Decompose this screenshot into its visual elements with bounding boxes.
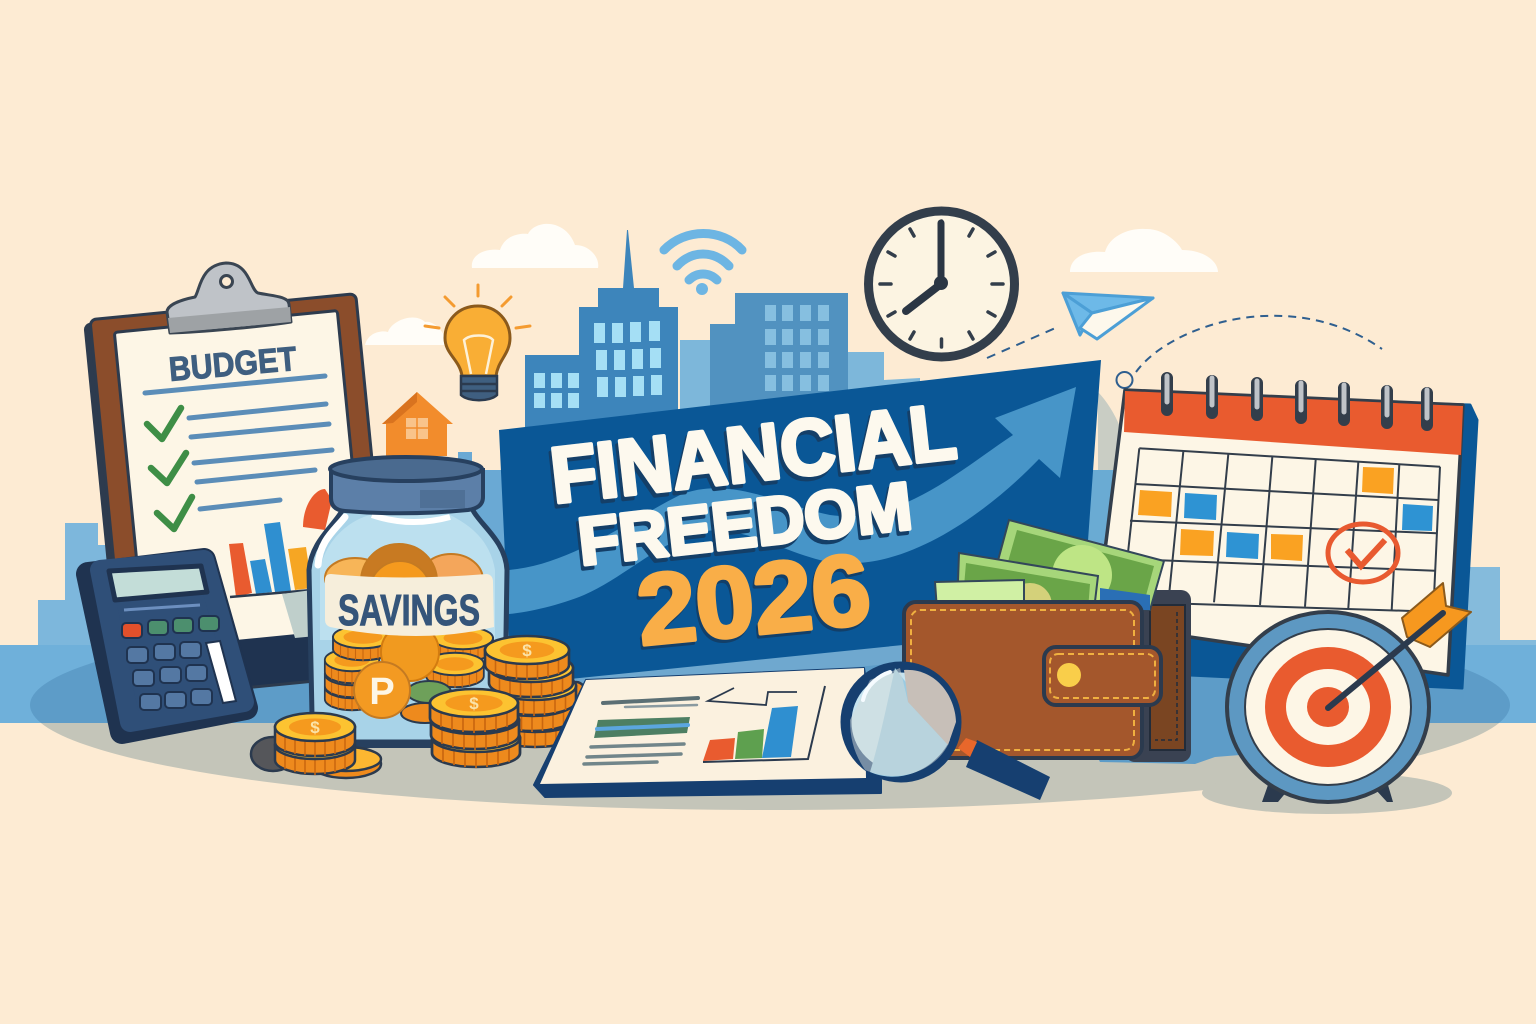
calculator screen (109, 566, 207, 600)
coin stack tall (485, 636, 577, 748)
target shadow (1202, 772, 1452, 814)
clipboard board (83, 294, 393, 702)
ground ellipse (30, 630, 1510, 810)
wifi icon (664, 234, 742, 295)
banknotes (935, 520, 1164, 627)
pale blue behind jar (458, 452, 505, 560)
coin stack left: $ (310, 718, 320, 737)
savings jar (309, 457, 507, 748)
calendar page (1095, 390, 1463, 675)
coins behind label (325, 544, 483, 619)
house icon (382, 392, 453, 456)
title line: Financial: FINANCIAL (543, 390, 958, 524)
banner (499, 360, 1101, 695)
clipboard (83, 263, 393, 702)
savings label (325, 574, 494, 636)
jar base shadow (318, 725, 500, 748)
clipboard clip (167, 263, 291, 333)
calendar check circle (1328, 524, 1398, 582)
target (1202, 583, 1471, 814)
budget heading: BUDGET (167, 340, 298, 389)
target legs (1262, 785, 1393, 802)
coin stack tall: $ (522, 641, 532, 660)
background skyline right (1440, 567, 1536, 660)
calendar header (1124, 391, 1463, 455)
title line: Freedom: FREEDOM (574, 469, 916, 580)
target arrow (1328, 583, 1471, 708)
clock (868, 211, 1014, 357)
wallet flap (1044, 647, 1161, 705)
wallet (904, 520, 1191, 762)
cloud small (365, 317, 447, 345)
budget list lines (145, 376, 332, 509)
coin stack middle: $ (469, 694, 479, 713)
wallet front (904, 602, 1142, 758)
title line: year: 2026 (632, 533, 875, 667)
blue ground band (0, 645, 1536, 723)
city buildings (525, 230, 920, 440)
jar coins lower: P (369, 671, 395, 713)
illustration scene (0, 206, 1536, 814)
report text lines (584, 698, 698, 764)
jar highlights (320, 515, 495, 640)
background skyline left (0, 523, 115, 660)
cloud right (1070, 229, 1218, 272)
mini bar chart (229, 489, 332, 638)
calculator (88, 560, 246, 732)
paper plane (1063, 293, 1153, 339)
coin stack middle (430, 689, 520, 768)
coin stack left (275, 713, 355, 775)
jar glass body (309, 500, 507, 742)
title line: Financial: FINANCIAL (546, 386, 960, 520)
title (543, 386, 961, 670)
light blue behind calendar (1080, 470, 1130, 640)
title line: year: 2026 (631, 536, 873, 670)
backdrop behind calendar (1080, 392, 1130, 600)
light bulb (425, 285, 530, 400)
calendar (1095, 376, 1477, 688)
side coin (565, 682, 587, 712)
calculator keys (122, 616, 236, 710)
dashed flight path to plane (987, 326, 1060, 358)
flat coins under left stack (251, 737, 381, 778)
calendar grid (1123, 448, 1440, 612)
magnifying glass (846, 667, 1050, 800)
green check marks (147, 408, 192, 529)
cloud left (472, 224, 598, 268)
jar lid (330, 457, 483, 513)
financial report sheet (534, 668, 881, 797)
savings label: SAVINGS (338, 586, 480, 635)
banner growth arrow (509, 387, 1076, 614)
wallet back (1125, 590, 1191, 762)
report chart (703, 686, 825, 762)
title line: Freedom: FREEDOM (572, 473, 913, 584)
calendar back (1100, 395, 1477, 688)
calendar rings (1167, 376, 1427, 425)
target rings (1227, 612, 1429, 802)
dashed curve to calendar (1116, 316, 1382, 388)
jar coins lower (325, 623, 493, 723)
calendar event squares (1138, 467, 1433, 561)
